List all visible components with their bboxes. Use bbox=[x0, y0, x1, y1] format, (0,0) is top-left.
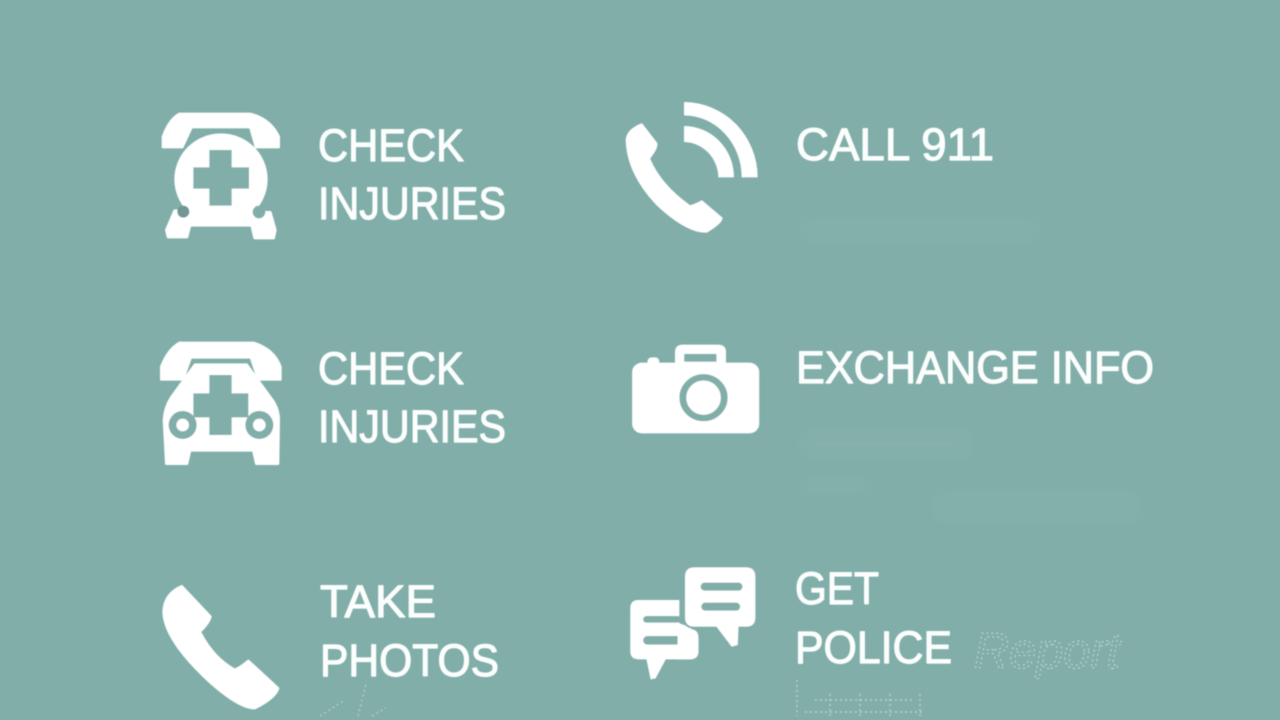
icon: camera bbox=[632, 345, 759, 433]
panel: call 911 bbox=[627, 102, 994, 232]
heading: check injuries: CHECK bbox=[318, 120, 464, 171]
panel: get police report bbox=[630, 563, 1122, 716]
panel: take photos bbox=[164, 576, 499, 716]
faint ghost word: report: Report bbox=[974, 623, 1122, 679]
panel: exchange info bbox=[632, 342, 1154, 433]
heading: check injuries: INJURIES bbox=[318, 401, 506, 452]
panel: check injuries, second row bbox=[161, 343, 506, 464]
heading: get police bbox=[795, 563, 952, 673]
icon: telephone with medical cross bbox=[163, 114, 279, 238]
heading: take photos bbox=[320, 576, 499, 686]
faint ghost marks below photos bbox=[320, 684, 386, 716]
heading: check injuries bbox=[318, 120, 506, 229]
heading: exchange info: EXCHANGE INFO bbox=[796, 342, 1154, 393]
heading: get police: POLICE bbox=[795, 622, 952, 673]
icon: phone with signal waves bbox=[627, 102, 758, 232]
icon: phone handset bbox=[164, 586, 278, 708]
heading: get police: GET bbox=[795, 563, 879, 614]
heading: take photos: TAKE bbox=[320, 576, 436, 627]
icon: speech bubbles bbox=[630, 567, 755, 679]
panel: check injuries, first row bbox=[163, 114, 506, 238]
heading: call 911: CALL 911 bbox=[796, 119, 994, 170]
heading: check injuries: CHECK bbox=[318, 343, 464, 394]
faint ghost marks below police bbox=[797, 680, 925, 716]
heading: check injuries: INJURIES bbox=[318, 178, 506, 229]
icon: telephone with car bbox=[161, 343, 280, 464]
heading: take photos: PHOTOS bbox=[320, 635, 499, 686]
heading: check injuries bbox=[318, 343, 506, 452]
